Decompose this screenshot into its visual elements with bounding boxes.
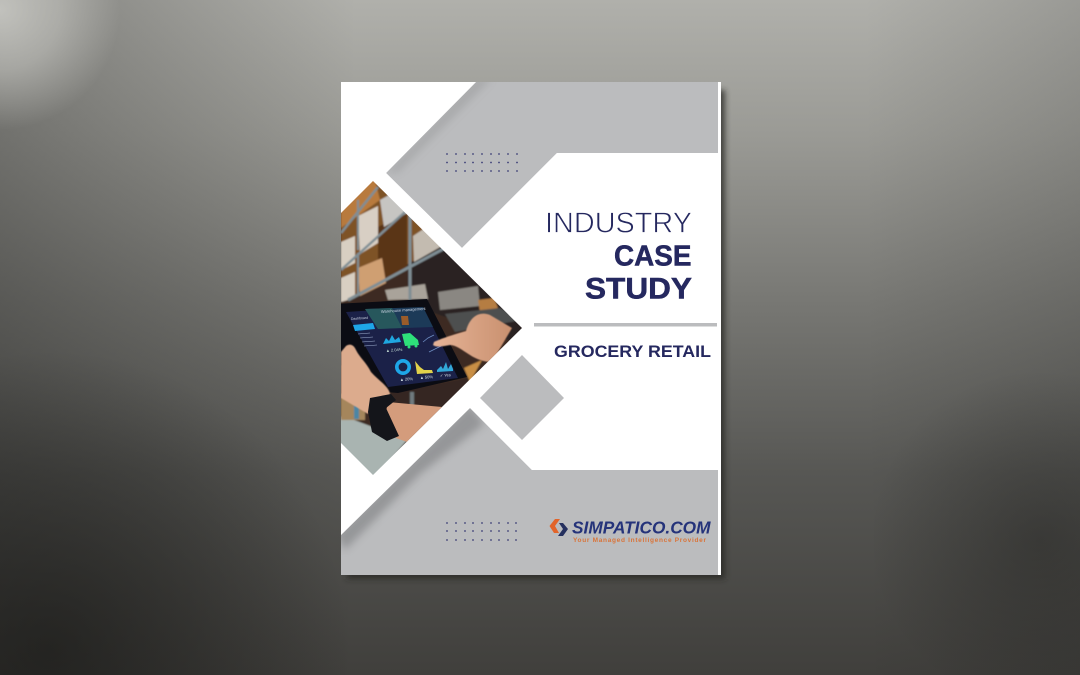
icon: logo chevrons: [550, 519, 568, 536]
logo: Your Managed Intelligence Provider: [573, 537, 706, 544]
title: STUDY: [585, 272, 692, 306]
title: [545, 208, 692, 306]
logo: SIMPATICO.COM: [572, 518, 711, 538]
divider: [534, 323, 717, 326]
panel: top grey shape: [386, 78, 718, 248]
title: INDUSTRY: [545, 208, 692, 240]
cover page: [341, 82, 721, 575]
report cover: [335, 78, 721, 575]
dots: top: [446, 153, 518, 172]
dots: bottom: [446, 522, 517, 541]
tablet: ▲ 50%: [420, 374, 434, 380]
tablet: ✓ Yes: [440, 372, 451, 378]
document shadow: [347, 90, 725, 579]
tablet: ▲ 20%: [400, 376, 414, 382]
pointing hand: [433, 314, 512, 362]
decorative diamond: [480, 355, 564, 440]
title: CASE: [614, 240, 692, 272]
left hand: [341, 345, 390, 414]
tablet: [335, 299, 467, 393]
tablet: ▲ 2.04%: [386, 347, 403, 353]
panel: bottom grey shape: [336, 404, 718, 575]
forearm: [386, 402, 442, 442]
warehouse shelves: [341, 181, 522, 475]
tablet: Warehouse management: [381, 306, 427, 314]
watch: [368, 394, 399, 441]
tablet: Dashboard: [351, 316, 368, 321]
photo: warehouse and tablet: [341, 181, 522, 475]
logo: [550, 518, 711, 544]
subtitle: GROCERY RETAIL: [554, 343, 711, 361]
